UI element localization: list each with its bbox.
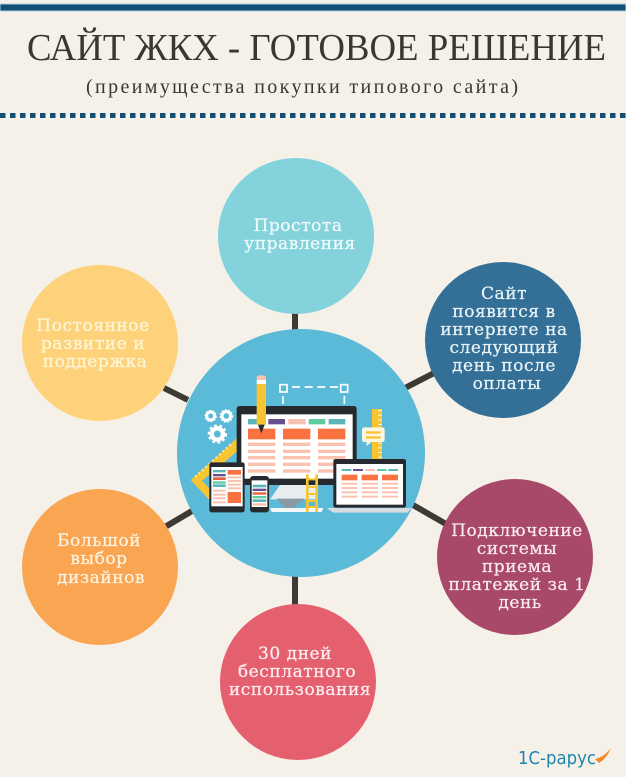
circle: site online next day: Сайт bbox=[481, 284, 527, 304]
icon: pencil bbox=[257, 375, 266, 433]
circle: 30 free days: бесплатного bbox=[238, 662, 356, 682]
circle: site online next day bbox=[425, 262, 581, 418]
circle: payment system: системы bbox=[477, 539, 557, 559]
subtitle: (преимущества покупки типового сайта) bbox=[86, 76, 518, 98]
icon: selection frame bbox=[280, 385, 348, 404]
connectors bbox=[164, 312, 446, 607]
top bar bbox=[0, 4, 626, 11]
icon: ladder bbox=[306, 474, 318, 512]
circle: constant development: поддержка bbox=[43, 352, 147, 372]
monitor bbox=[237, 406, 357, 512]
logo: 1С-рарус bbox=[518, 748, 596, 769]
circle: simplicity of management bbox=[218, 158, 374, 314]
icon: gears bbox=[205, 410, 232, 443]
tablet bbox=[209, 462, 245, 512]
icon: speech bubble bbox=[362, 427, 385, 446]
circle: constant development: Постоянное bbox=[36, 316, 150, 336]
title: САЙТ ЖКХ - ГОТОВОЕ РЕШЕНИЕ bbox=[27, 27, 606, 69]
circle: site online next day: день после bbox=[452, 356, 556, 376]
circle: simplicity of management: управления bbox=[244, 234, 356, 254]
circle: simplicity of management: Простота bbox=[253, 216, 343, 236]
circle: site online next day: интернете на bbox=[440, 320, 568, 340]
circle: site online next day: оплаты bbox=[473, 374, 541, 394]
laptop bbox=[327, 459, 412, 513]
circle: 30 free days: использования bbox=[229, 680, 371, 700]
circle: payment system: день bbox=[498, 593, 542, 613]
circle: constant development bbox=[22, 265, 178, 421]
circle: site online next day: появится в bbox=[452, 302, 556, 322]
illustration: devices bbox=[191, 375, 412, 513]
circle: payment system bbox=[437, 479, 593, 635]
circle: payment system: платежей за 1 bbox=[449, 575, 585, 595]
circle: 30 free days: 30 дней bbox=[258, 644, 332, 664]
circle: payment system: Подключение bbox=[451, 521, 583, 541]
circle: choice of designs: Большой bbox=[57, 531, 141, 551]
circle: payment system: приема bbox=[482, 557, 552, 577]
icon: triangle ruler bbox=[191, 438, 237, 500]
circle: choice of designs: выбор bbox=[70, 549, 128, 569]
circle: constant development: развитие и bbox=[41, 334, 145, 354]
circle: 30 free days bbox=[220, 604, 376, 760]
circle: choice of designs: дизайнов bbox=[57, 568, 145, 588]
phone bbox=[250, 476, 269, 512]
icon: vertical ruler bbox=[372, 409, 382, 461]
circle: site online next day: следующий bbox=[449, 338, 559, 358]
central circle bbox=[177, 329, 425, 577]
circle: choice of designs bbox=[22, 489, 178, 645]
